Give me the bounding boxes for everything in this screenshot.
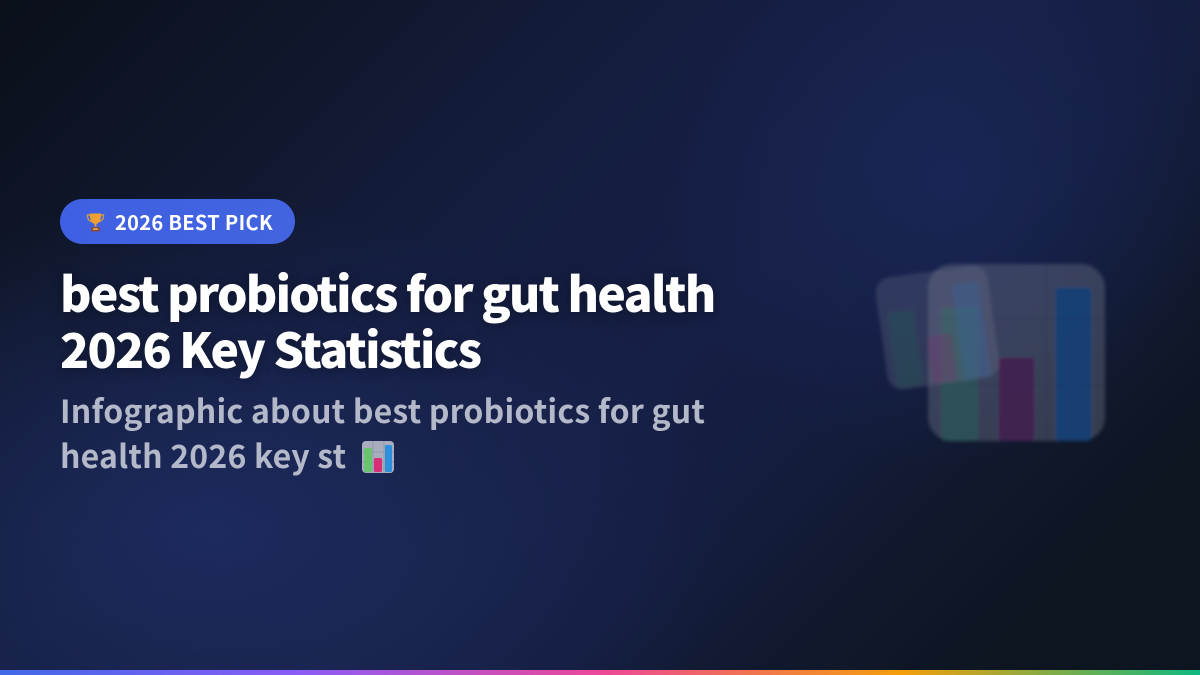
- rainbow bottom bar: [0, 670, 1200, 675]
- badge label: 2026 BEST PICK: [115, 207, 273, 236]
- subtitle: Infographic about best probiotics for gut: [60, 387, 705, 433]
- subtitle: [60, 387, 705, 478]
- icon: tilted back chart card: [874, 264, 1001, 391]
- icon: bar chart emoji: [362, 441, 394, 473]
- title: best probiotics for gut health: [60, 256, 715, 326]
- badge: 2026 best pick: [60, 199, 295, 244]
- icon: front chart card: [928, 264, 1105, 441]
- subtitle: health 2026 key st: [60, 432, 346, 478]
- title: 2026 Key Statistics: [60, 312, 480, 382]
- icon: large blurred bar chart emoji: [875, 262, 1106, 443]
- title: [60, 256, 715, 382]
- icon: trophy: [86, 214, 104, 232]
